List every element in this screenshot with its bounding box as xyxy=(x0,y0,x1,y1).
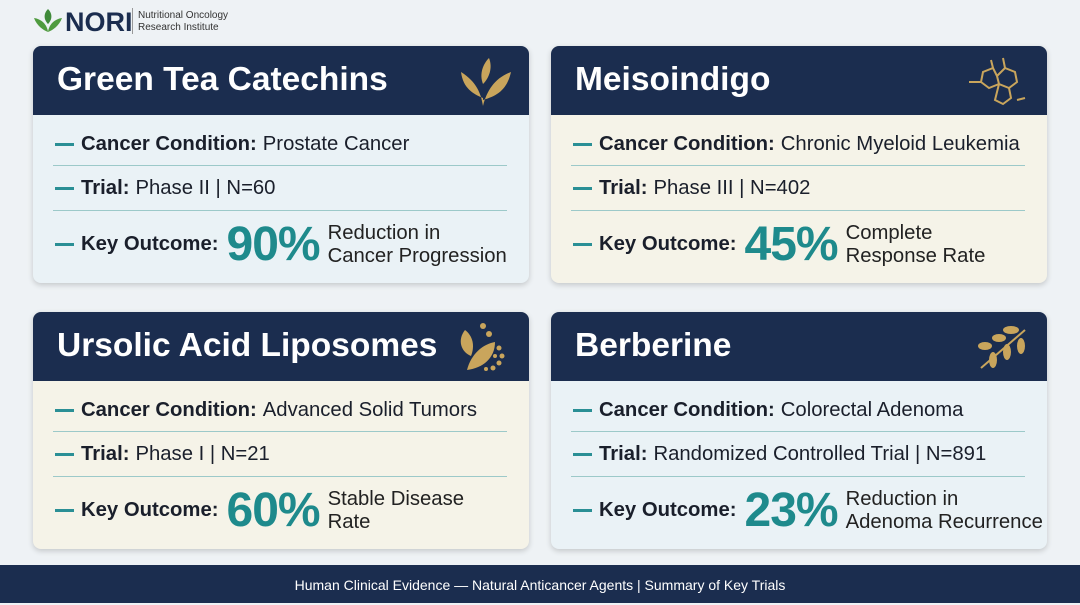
panel: ursolic acid: Key Outcome: xyxy=(81,499,218,521)
panel: berberine: Cancer Condition: xyxy=(599,399,775,421)
panel: ursolic acid: Advanced Solid Tumors xyxy=(263,399,477,421)
panel: berberine: Trial: xyxy=(599,443,647,465)
panel: ursolic acid: Phase I | N=21 xyxy=(135,443,270,465)
header: berberine: Berberine xyxy=(575,327,731,364)
header: green tea xyxy=(33,46,529,115)
panel: berberine: Adenoma Recurrence xyxy=(846,510,1043,532)
logo xyxy=(34,7,228,37)
panel: green tea: Phase II | N=60 xyxy=(135,177,275,199)
panel: meisoindigo: Complete xyxy=(846,222,932,244)
logo: Nutritional Oncology xyxy=(138,10,228,21)
header: ursolic xyxy=(33,312,529,381)
header: ursolic: Ursolic Acid Liposomes xyxy=(57,327,437,364)
panel: ursolic acid: 60% xyxy=(226,484,320,537)
logo: NORI xyxy=(65,7,132,37)
panel: green tea: 90% xyxy=(226,218,320,271)
panel: meisoindigo: Trial: xyxy=(599,177,647,199)
logo: Research Institute xyxy=(138,22,219,33)
panel: ursolic acid: Stable Disease xyxy=(328,488,464,510)
panel: green tea: Trial: xyxy=(81,177,129,199)
panel: berberine: Key Outcome: xyxy=(599,499,736,521)
footer xyxy=(0,565,1080,603)
panel: meisoindigo: Key Outcome: xyxy=(599,233,736,255)
panel: green tea: Cancer Condition: xyxy=(81,133,257,155)
panel: berberine: Randomized Controlled Trial | N=891 xyxy=(653,443,986,465)
panel: meisoindigo: 45% xyxy=(744,218,838,271)
panel: ursolic acid: Trial: xyxy=(81,443,129,465)
panel: meisoindigo: Response Rate xyxy=(846,244,985,266)
panel: green tea: Cancer Progression xyxy=(328,244,507,266)
header: berberine xyxy=(551,312,1047,381)
panel: ursolic acid: Cancer Condition: xyxy=(81,399,257,421)
header: green tea: Green Tea Catechins xyxy=(57,61,388,98)
panel: berberine: 23% xyxy=(744,484,838,537)
header: meisoindigo xyxy=(551,46,1047,115)
panel: green tea xyxy=(33,46,529,283)
panel: ursolic acid xyxy=(33,312,529,549)
header: meisoindigo: Meisoindigo xyxy=(575,61,770,98)
panel: meisoindigo: Cancer Condition: xyxy=(599,133,775,155)
panel: ursolic acid: Rate xyxy=(328,510,370,532)
panel: berberine: Reduction in xyxy=(846,488,958,510)
panel: meisoindigo xyxy=(551,46,1047,283)
panel: meisoindigo: Chronic Myeloid Leukemia xyxy=(781,133,1020,155)
panel: green tea: Reduction in xyxy=(328,222,440,244)
panel: berberine: Colorectal Adenoma xyxy=(781,399,963,421)
footer: Human Clinical Evidence — Natural Anticancer Agents | Summary of Key Trials xyxy=(295,577,785,593)
panel: berberine xyxy=(551,312,1047,549)
panel: green tea: Prostate Cancer xyxy=(263,133,409,155)
panel: meisoindigo: Phase III | N=402 xyxy=(653,177,810,199)
panel: green tea: Key Outcome: xyxy=(81,233,218,255)
